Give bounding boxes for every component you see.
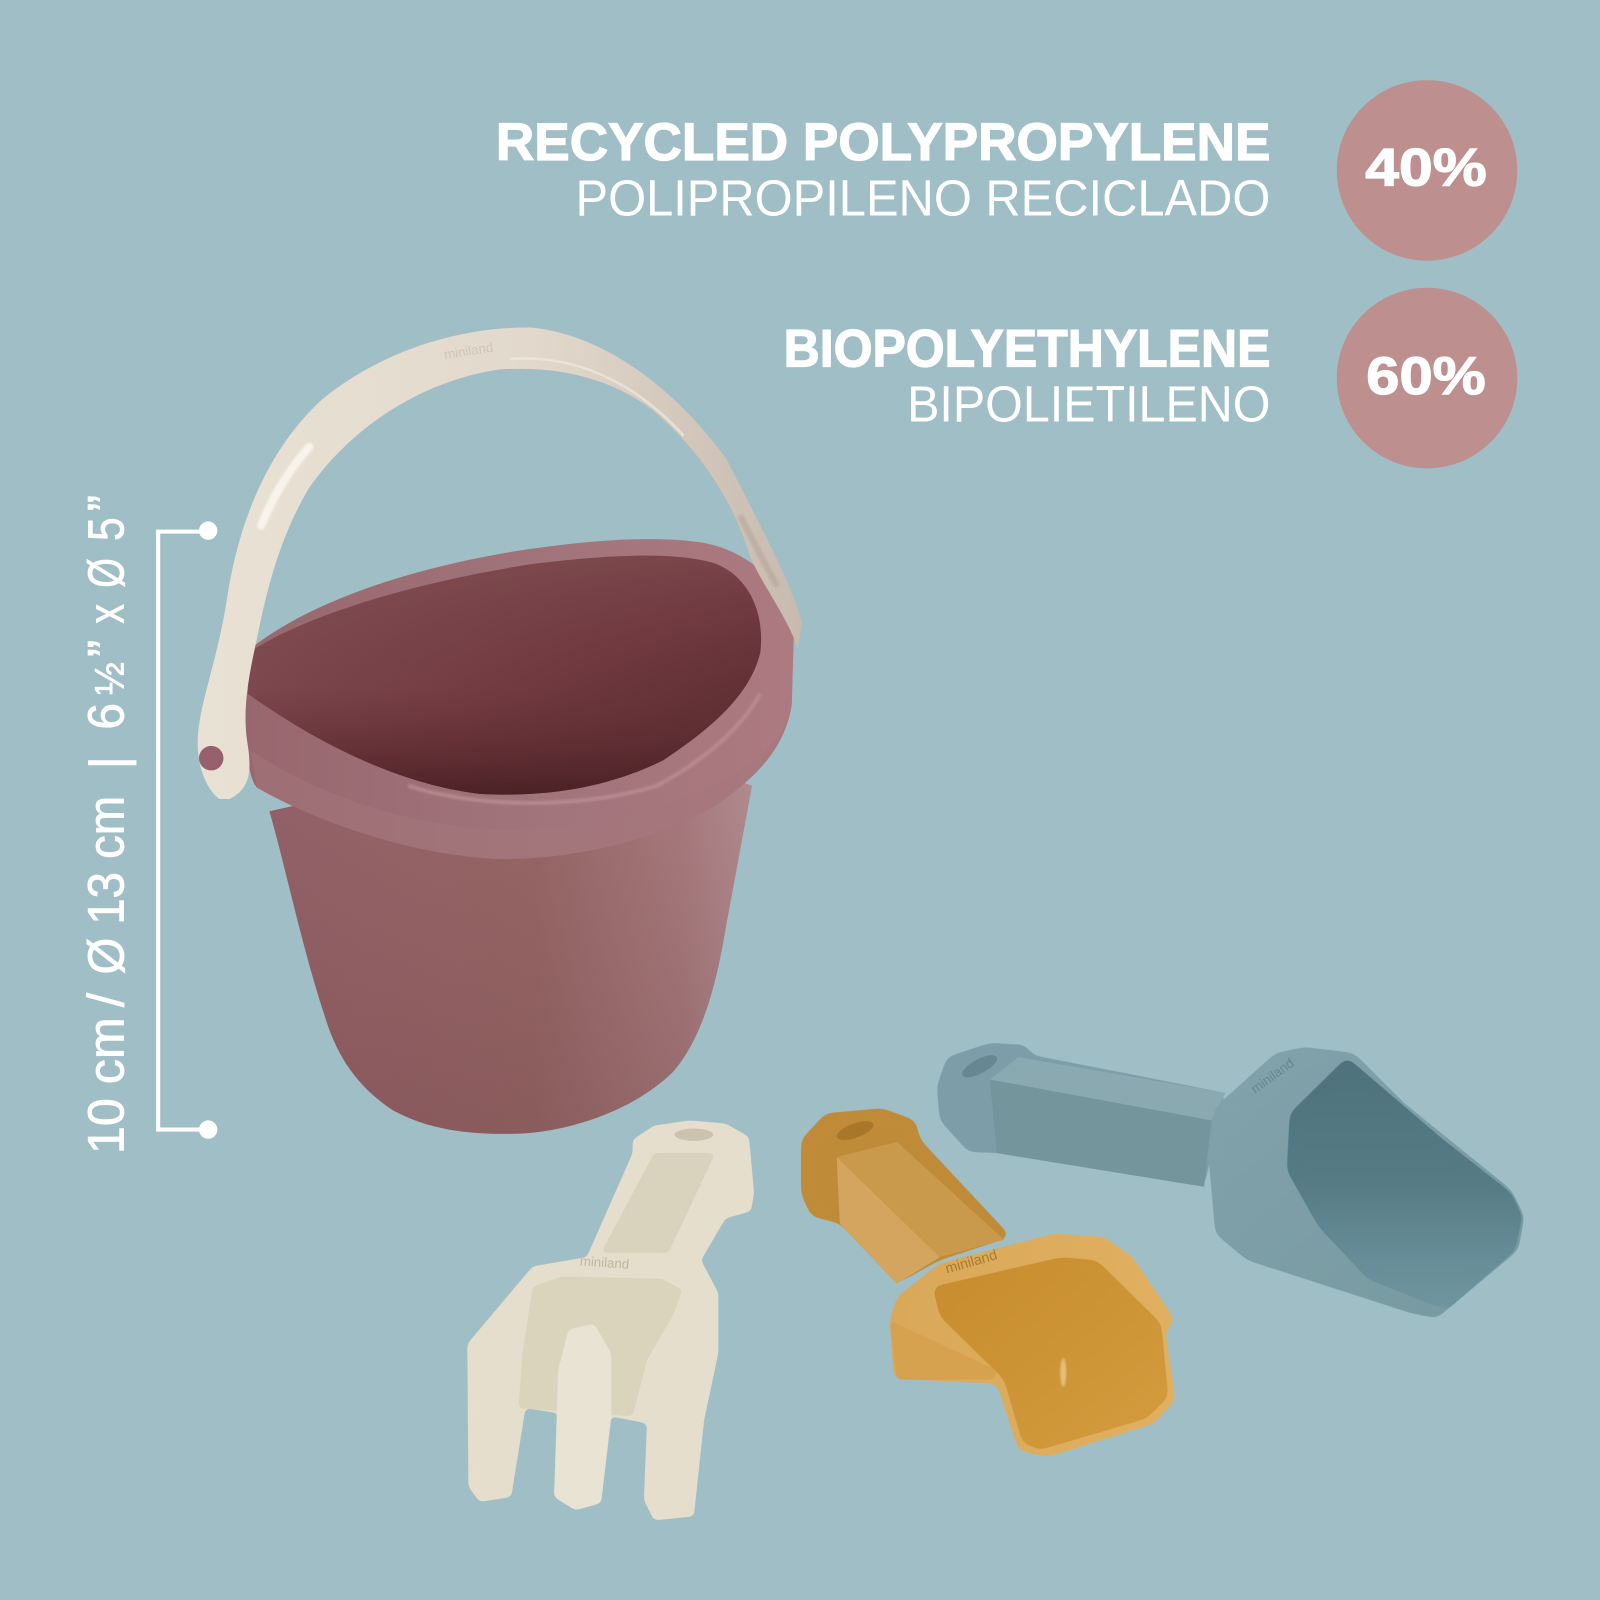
badge: 60 percent: 60% (1366, 347, 1486, 406)
product: cream fork: miniland (579, 1253, 630, 1272)
fork head recess (518, 1277, 683, 1416)
fork middle tine (554, 1323, 611, 1510)
badge: 40 percent: 40% (1365, 139, 1487, 198)
bucket body (269, 735, 752, 1134)
subheading: polipropileno reciclado: POLIPROPILENO RECICLADO (576, 169, 1270, 226)
bucket interior (248, 556, 761, 795)
heading: recycled polypropylene: RECYCLED POLYPROPYLENE (496, 113, 1270, 172)
dimension text: x (77, 604, 134, 623)
heading: biopolyethylene: BIOPOLYETHYLENE (784, 319, 1270, 378)
subheading: bipolietileno: BIPOLIETILENO (907, 375, 1270, 432)
blue scoop head: miniland (1248, 1055, 1297, 1096)
yellow scoop head: miniland (944, 1247, 999, 1277)
dimension text: ” (77, 495, 134, 511)
product: cream fork (467, 1120, 754, 1520)
bucket rim (244, 539, 794, 859)
fork handle recess (601, 1129, 715, 1253)
dimension text: | (80, 756, 137, 769)
dimension text: Ø 13 cm (77, 796, 134, 974)
dimension text: ½ (86, 662, 132, 695)
bucket handle: miniland (443, 340, 494, 362)
dimension text: Ø (77, 558, 134, 588)
product: blue scoop (937, 1043, 1524, 1318)
product: yellow scoop (801, 1108, 1176, 1457)
dimension callout (77, 495, 217, 1154)
dimension text: 6 (77, 703, 134, 730)
fork body and tines (467, 1120, 754, 1520)
material row: recycled polypropylene (496, 80, 1517, 261)
dimension text (77, 495, 137, 1154)
blue scoop head (1208, 1047, 1524, 1318)
dimension text: 10 cm (77, 1017, 134, 1154)
bucket handle (198, 328, 802, 799)
badge: 40 percent (1337, 80, 1517, 261)
dimension bracket (158, 521, 217, 1139)
dimension text: 5 (77, 517, 134, 541)
yellow scoop head (890, 1234, 1176, 1457)
product: bucket (198, 328, 802, 1134)
material row: biopolyethylene (784, 288, 1517, 468)
badge: 60 percent (1337, 288, 1517, 468)
yellow scoop handle (801, 1108, 1011, 1284)
dimension text: ” (77, 640, 134, 657)
handle pivot pin (199, 746, 223, 770)
dimension text: / (77, 992, 134, 1007)
blue scoop handle (937, 1043, 1226, 1187)
